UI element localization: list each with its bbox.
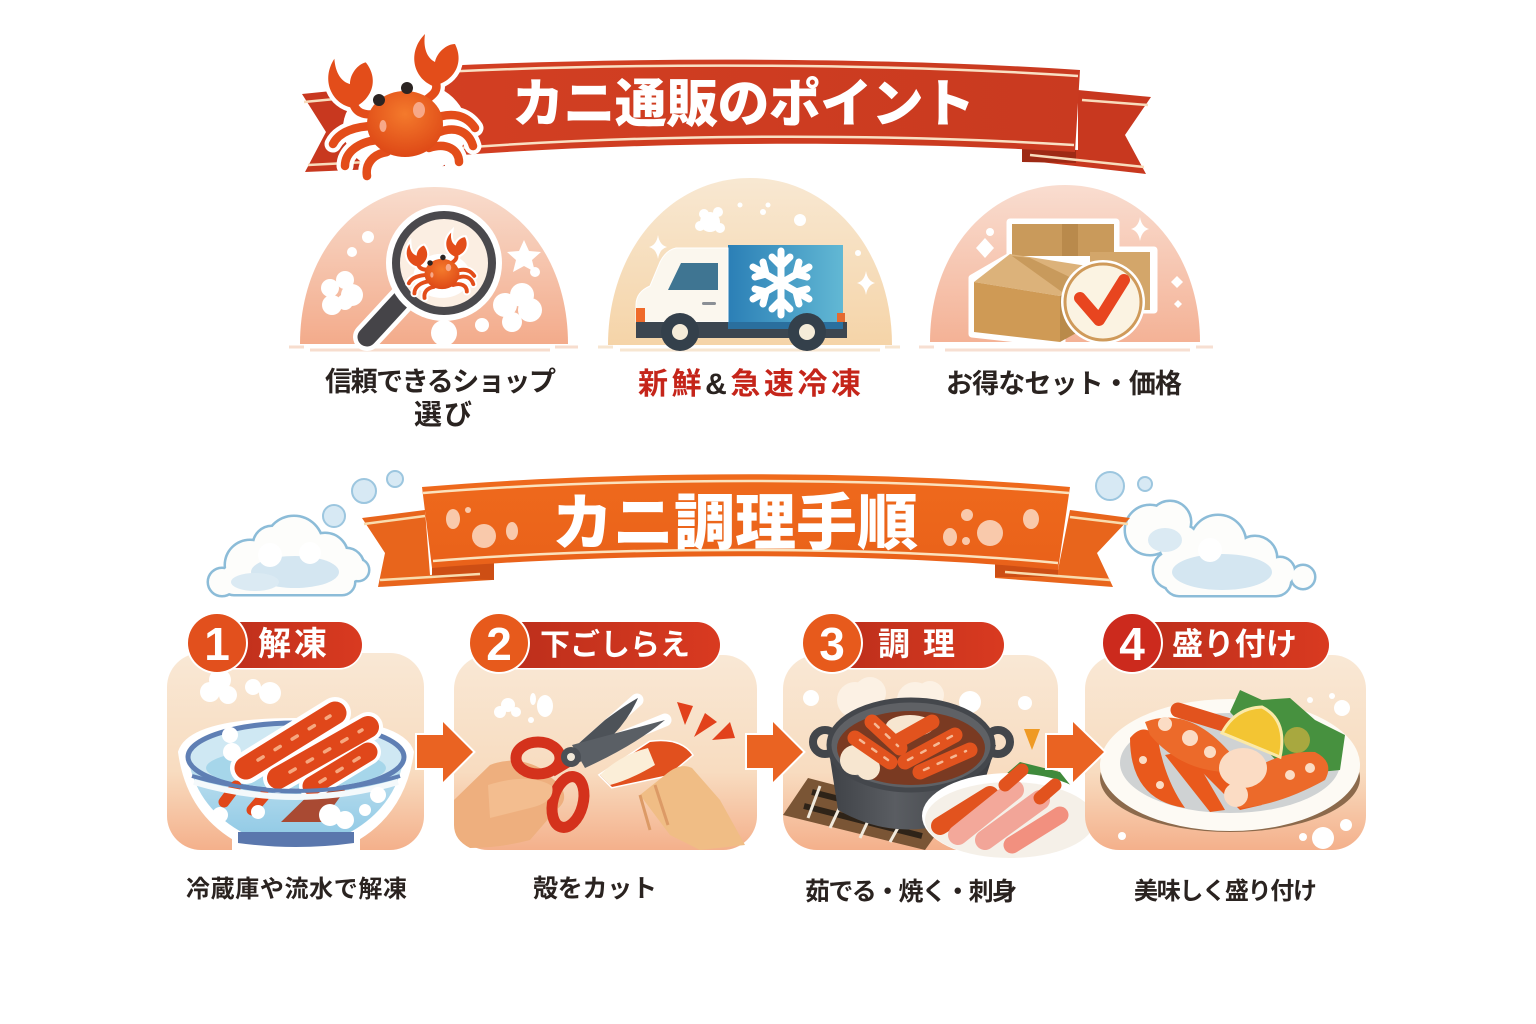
caption: 美味しく盛り付け bbox=[1134, 878, 1317, 905]
dome background bbox=[300, 187, 568, 344]
icon: cracked crab leg bbox=[600, 741, 692, 787]
bubbles bbox=[1118, 693, 1352, 849]
pill heading: 解凍 bbox=[258, 625, 327, 662]
snow sparkles bbox=[649, 202, 875, 295]
snowflake bbox=[753, 251, 809, 315]
bubbles bbox=[494, 693, 553, 723]
pill heading bbox=[186, 612, 362, 674]
icon: wooden trivet bbox=[783, 778, 950, 850]
step 1: thaw bbox=[167, 612, 424, 903]
label: 選び bbox=[414, 399, 472, 430]
check badge bbox=[1061, 260, 1145, 344]
panel background bbox=[783, 655, 1058, 850]
icon: refrigerated truck bbox=[636, 245, 847, 351]
icon: magnifying glass with crab bbox=[367, 205, 502, 337]
lemon bbox=[1222, 707, 1282, 757]
icon: kitchen scissors bbox=[516, 698, 665, 831]
title text: カニ通販のポイント bbox=[512, 76, 975, 134]
panel background bbox=[167, 653, 424, 850]
icon: pot with crab legs bbox=[813, 700, 1010, 830]
pill heading: 下ごしらえ bbox=[540, 628, 690, 662]
icon: crab mascot bbox=[324, 34, 475, 176]
point 2: fresh and flash-frozen bbox=[598, 178, 900, 401]
panel background bbox=[454, 655, 757, 850]
pill heading: 2 bbox=[486, 618, 512, 670]
label: 信頼できるショップ bbox=[325, 367, 556, 397]
accent mark bbox=[1024, 729, 1040, 750]
icon: cardboard boxes with check bbox=[972, 222, 1154, 344]
panel background bbox=[1085, 655, 1366, 850]
cut marks bbox=[677, 702, 735, 740]
label: 新鮮&急速冷凍 bbox=[638, 368, 861, 401]
sparkles bbox=[976, 217, 1183, 308]
icon: left soap cloud and bubbles bbox=[209, 471, 403, 595]
caption: 殻をカット bbox=[533, 875, 657, 903]
title banner: カニ通販のポイント bbox=[302, 60, 1151, 174]
pill heading: 3 bbox=[819, 618, 845, 670]
pill heading bbox=[1101, 612, 1329, 674]
pill heading bbox=[468, 612, 720, 674]
pill heading: 4 bbox=[1119, 618, 1145, 670]
bubbles bbox=[321, 231, 542, 346]
icon: right soap cloud and bubbles bbox=[1096, 472, 1314, 595]
steam bbox=[837, 677, 944, 718]
caption: 冷蔵庫や流水で解凍 bbox=[186, 876, 407, 903]
arrow: step 2 to 3 bbox=[747, 722, 803, 782]
icon: plate of crab sashimi bbox=[922, 762, 1098, 859]
steam bubbles bbox=[200, 669, 281, 704]
step 3: cook bbox=[783, 612, 1098, 906]
thumb over handle bbox=[488, 779, 553, 818]
step 4: plate bbox=[1085, 612, 1366, 905]
section title text: カニ調理手順 bbox=[552, 489, 918, 557]
point 3: good value sets bbox=[919, 185, 1213, 399]
icon: plate with crab and lemon bbox=[1100, 690, 1360, 832]
bubble dots bbox=[446, 507, 1039, 548]
crab pieces bbox=[1130, 729, 1262, 812]
point 1: trusted shop bbox=[289, 187, 578, 430]
caption: 茹でる・焼く・刺身 bbox=[805, 878, 1017, 906]
icon: right hand bbox=[640, 766, 745, 850]
pill heading bbox=[801, 612, 1004, 674]
pill heading: 盛り付け bbox=[1172, 627, 1297, 662]
step 2: prepare bbox=[454, 612, 757, 903]
arrow: step 3 to 4 bbox=[1047, 722, 1104, 782]
pill heading: 1 bbox=[204, 618, 230, 670]
icon: glass bowl with crab legs bbox=[180, 713, 412, 852]
dome background bbox=[608, 178, 892, 345]
dome background bbox=[930, 185, 1200, 342]
icon: left hand bbox=[454, 761, 564, 848]
label: お得なセット・価格 bbox=[946, 369, 1182, 399]
label bbox=[325, 367, 556, 430]
arrow: step 1 to 2 bbox=[417, 722, 473, 782]
section banner: カニ調理手順 bbox=[362, 474, 1130, 587]
pill heading: 調理 bbox=[878, 626, 955, 662]
crab legs bbox=[224, 713, 368, 810]
